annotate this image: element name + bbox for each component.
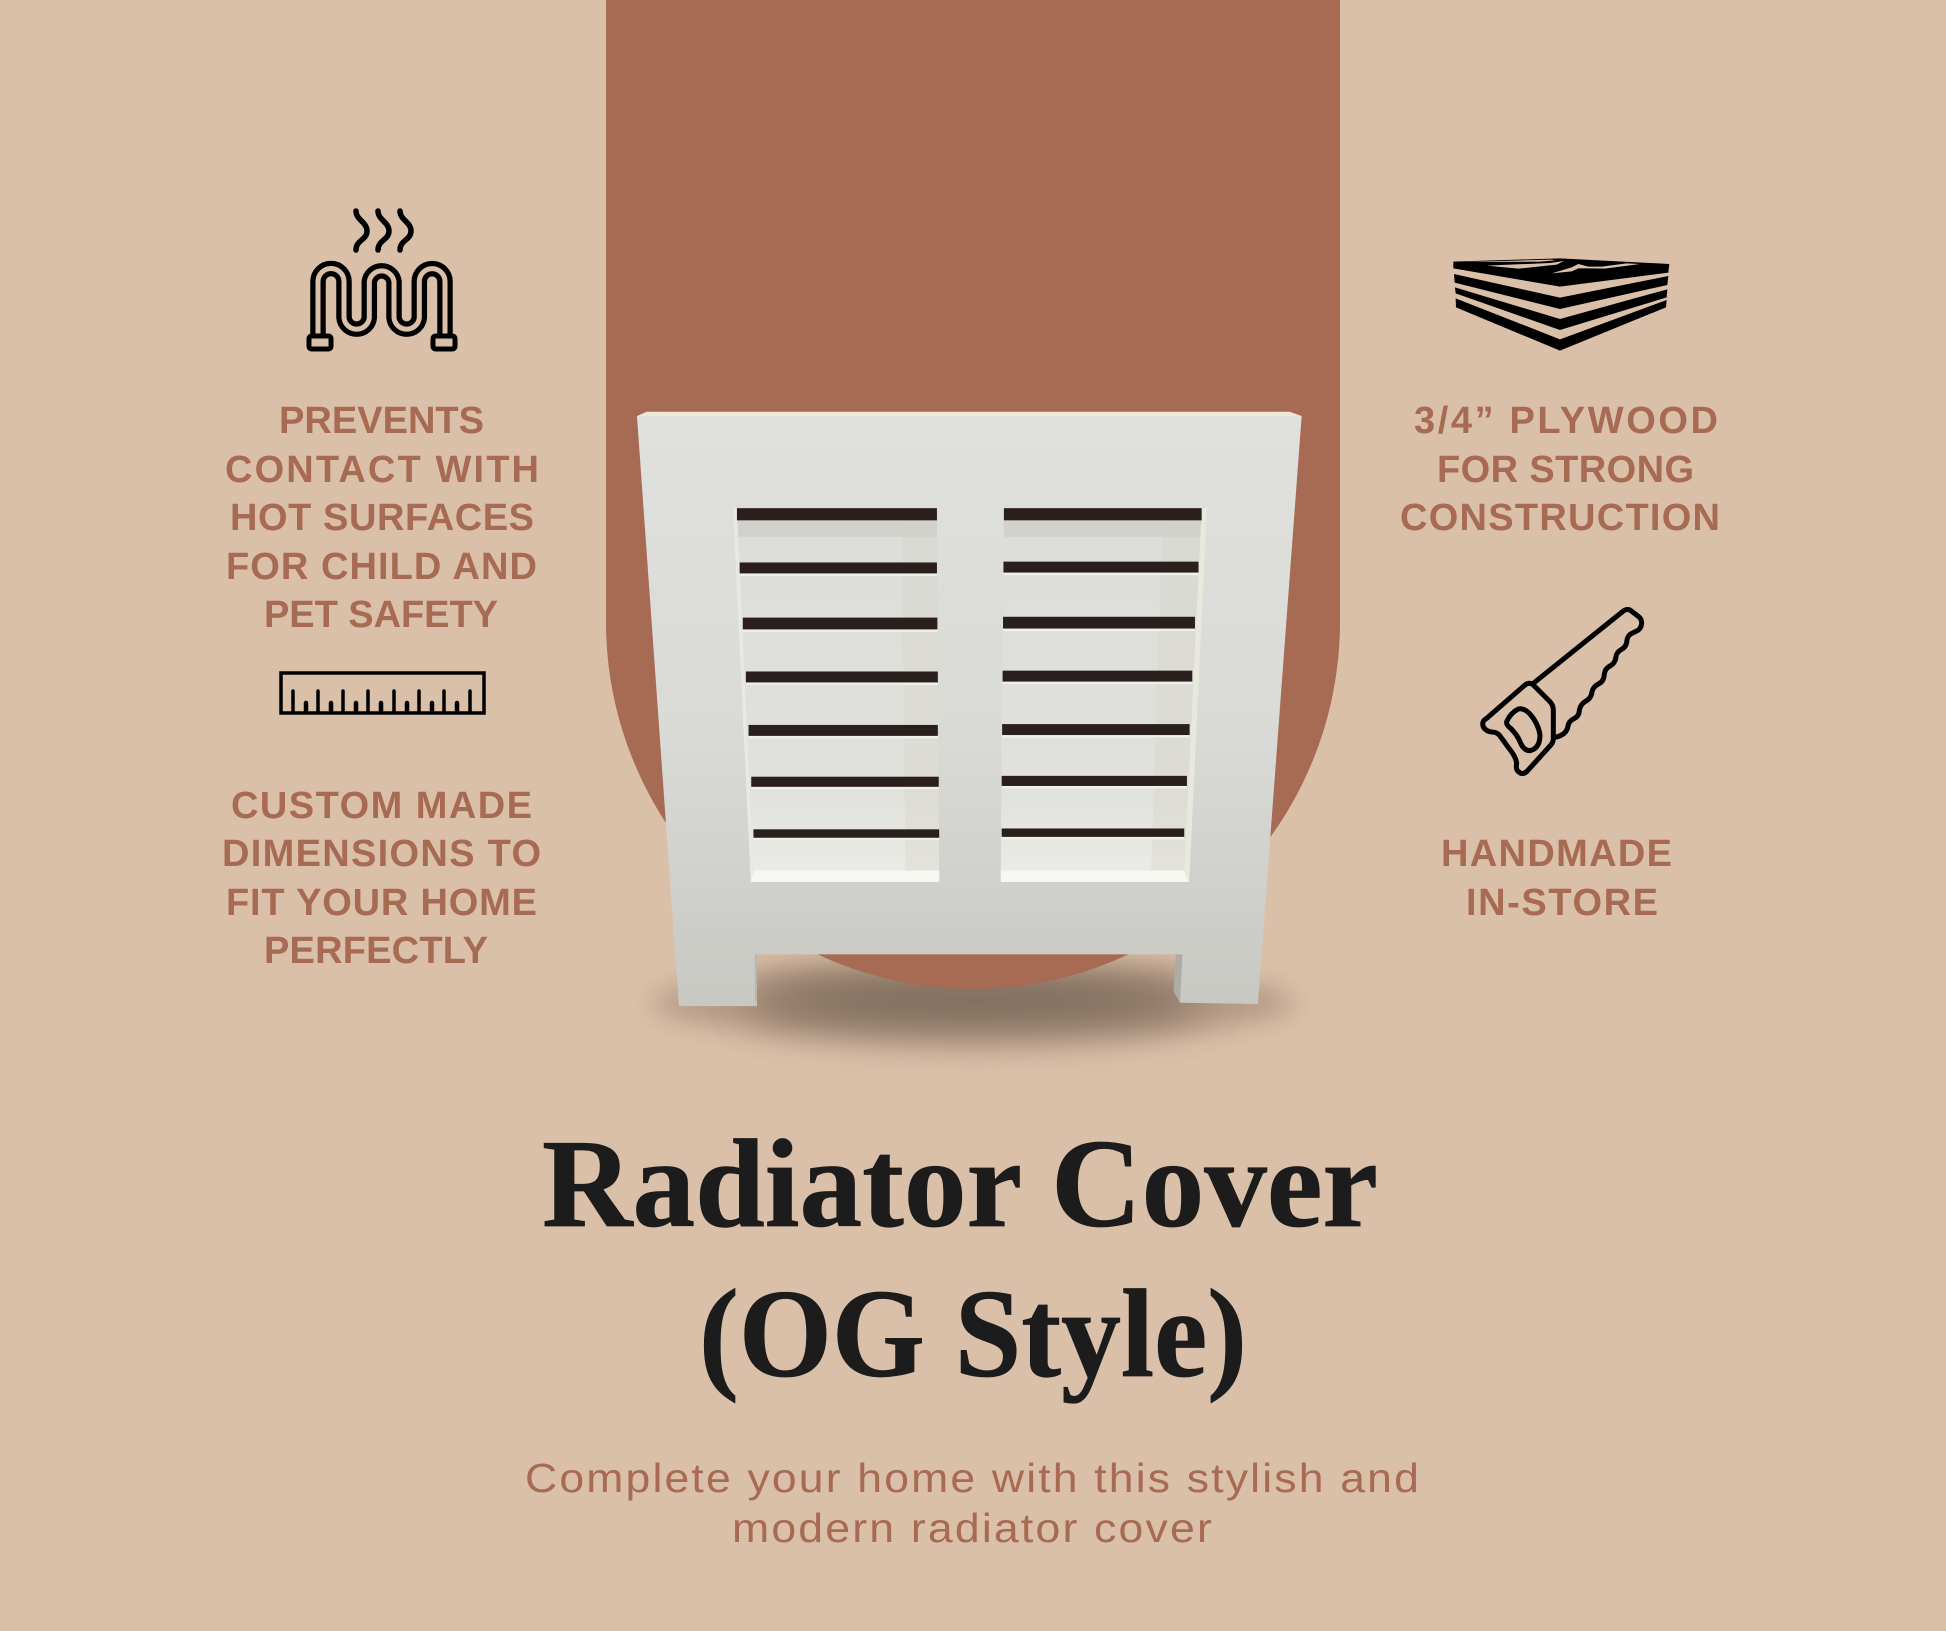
- text: handmade: IN-STORE: [1466, 882, 1658, 924]
- text: plywood: [1400, 400, 1720, 539]
- icon: hand saw: [1483, 610, 1642, 774]
- text: prevents contact: PET SAFETY: [264, 594, 498, 636]
- text: prevents contact: CONTACT WITH: [225, 449, 539, 491]
- subtitle: modern radiator cover: [732, 1505, 1214, 1551]
- text: custom made: PERFECTLY: [264, 930, 488, 972]
- title: (OG Style): [699, 1265, 1247, 1404]
- text: prevents contact: HOT SURFACES: [230, 497, 534, 539]
- text: plywood: FOR STRONG: [1437, 449, 1694, 491]
- right vent pane: [1001, 506, 1207, 882]
- text: plywood: CONSTRUCTION: [1400, 497, 1720, 539]
- text: custom made: FIT YOUR HOME: [226, 882, 537, 924]
- text: custom made: DIMENSIONS TO: [222, 833, 541, 875]
- title: [542, 1115, 1378, 1404]
- left vent pane: [733, 506, 939, 882]
- text: custom made: CUSTOM MADE: [231, 785, 532, 827]
- icon: radiator with heat: [309, 211, 455, 349]
- radiator cover product: [637, 412, 1302, 1006]
- text: handmade: [1441, 833, 1672, 924]
- title: Radiator Cover: [542, 1115, 1378, 1254]
- text: prevents contact: [225, 400, 539, 636]
- text: prevents contact: FOR CHILD AND: [226, 546, 537, 588]
- icon: plywood stack: [1453, 258, 1669, 351]
- terracotta arch: [606, 0, 1340, 989]
- shadow under cover: [651, 965, 1295, 1041]
- text: custom made: [222, 785, 541, 972]
- text: plywood: 3/4” PLYWOOD: [1414, 400, 1718, 442]
- subtitle: [525, 1455, 1421, 1551]
- icon: ruler: [281, 673, 484, 713]
- text: prevents contact: PREVENTS: [279, 400, 484, 442]
- text: handmade: HANDMADE: [1441, 833, 1672, 875]
- subtitle: Complete your home with this stylish and: [525, 1455, 1421, 1501]
